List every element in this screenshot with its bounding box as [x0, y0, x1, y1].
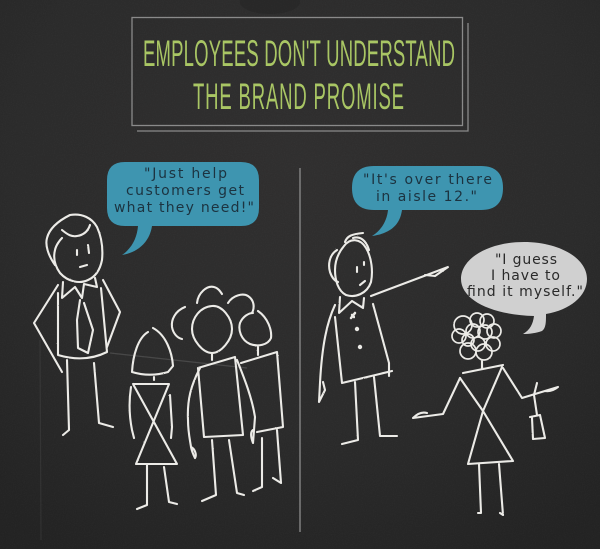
figure: customer [413, 313, 558, 515]
speech bubble: employee [352, 166, 503, 236]
speech bubble: manager [107, 162, 259, 255]
curly hair [452, 313, 501, 360]
title: EMPLOYEES DON'T UNDERSTAND [143, 34, 455, 75]
speech bubble: customer: find it myself." [467, 284, 583, 300]
speech bubble: manager: "Just help [144, 166, 227, 182]
figure: man employee, back [239, 311, 283, 491]
speech bubble: employee: in aisle 12." [376, 189, 477, 205]
figure: pointing employee [319, 233, 448, 444]
figure: manager [34, 215, 120, 435]
speech bubble: employee: "It's over there [363, 172, 492, 188]
title: THE BRAND PROMISE [193, 77, 404, 118]
speech bubble: manager: customers get [126, 183, 244, 199]
speech bubble: customer: "I guess [495, 252, 557, 268]
figure: man employee, front [172, 287, 255, 501]
figure: woman employee [130, 328, 177, 509]
speech bubble: customer: I have to [491, 268, 560, 284]
title box [132, 18, 468, 131]
title [143, 34, 455, 118]
divider [299, 168, 301, 532]
speech bubble: manager: what they need!" [114, 200, 254, 216]
speech bubble: customer [461, 242, 587, 334]
